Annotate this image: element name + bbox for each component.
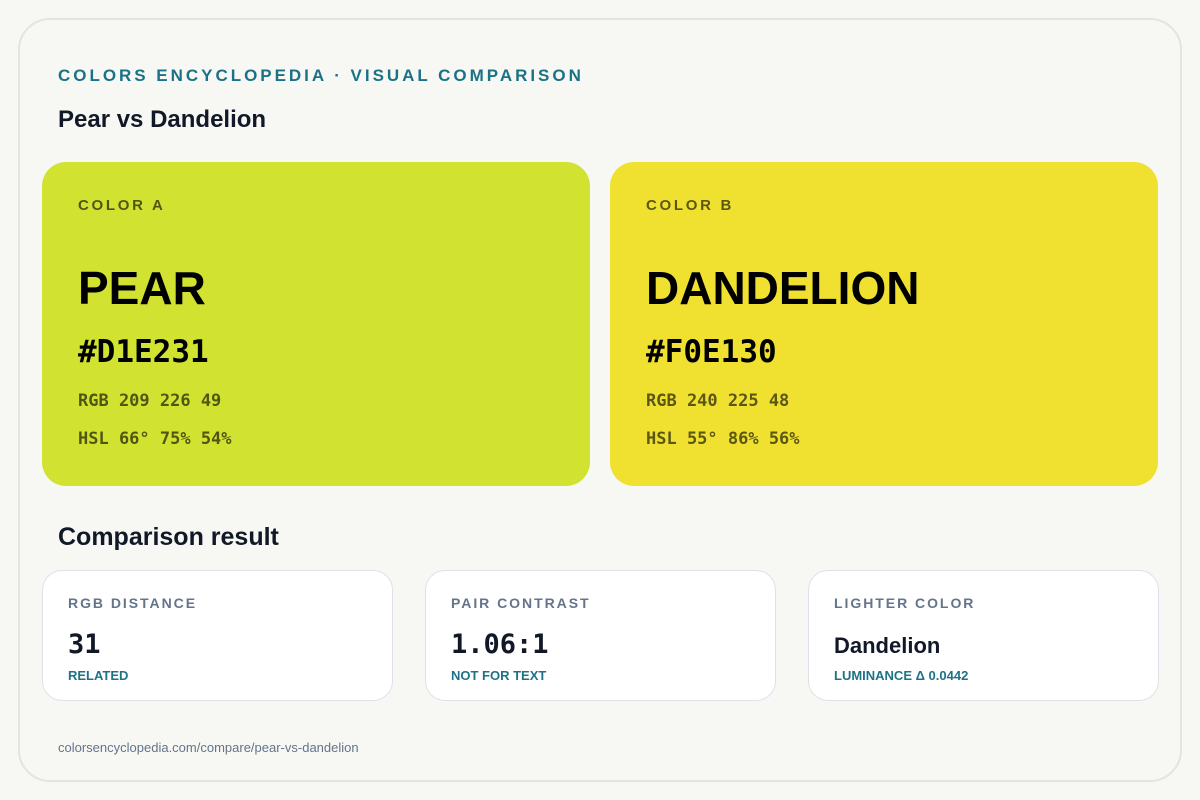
card label: PAIR CONTRAST [451,595,591,611]
card value: Dandelion [834,632,940,658]
card note: NOT FOR TEXT [451,668,546,682]
card note: RELATED [68,668,128,682]
color B hex: #F0E130 [646,334,777,370]
panel: color A [42,162,590,486]
color A label: COLOR A [78,197,166,214]
eyebrow heading: COLORS ENCYCLOPEDIA · VISUAL COMPARISON [58,66,584,85]
title: Pear vs Dandelion [58,106,266,133]
card: lighter color [808,570,1158,700]
card: pair contrast [424,570,776,700]
color B label: COLOR B [646,197,734,214]
color A hex: #D1E231 [78,334,209,370]
color A RGB: RGB 209 226 49 [78,391,221,411]
card: RGB distance [42,570,392,700]
panel: color B [610,162,1158,486]
section heading: comparison result: Comparison result [58,523,279,551]
footer URL: colorsencyclopedia.com/compare/pear-vs-dandelion [58,740,359,755]
color B RGB: RGB 240 225 48 [646,391,789,411]
card note: LUMINANCE Δ 0.0442 [834,668,968,682]
color B name: DANDELION [646,262,919,314]
card label: LIGHTER COLOR [834,595,975,611]
card value: 1.06:1 [451,628,549,660]
color A HSL: HSL 66° 75% 54% [78,429,232,449]
card value: 31 [68,628,101,660]
card label: RGB DISTANCE [68,595,197,611]
color B HSL: HSL 55° 86% 56% [646,429,800,449]
color A name: PEAR [78,262,206,314]
